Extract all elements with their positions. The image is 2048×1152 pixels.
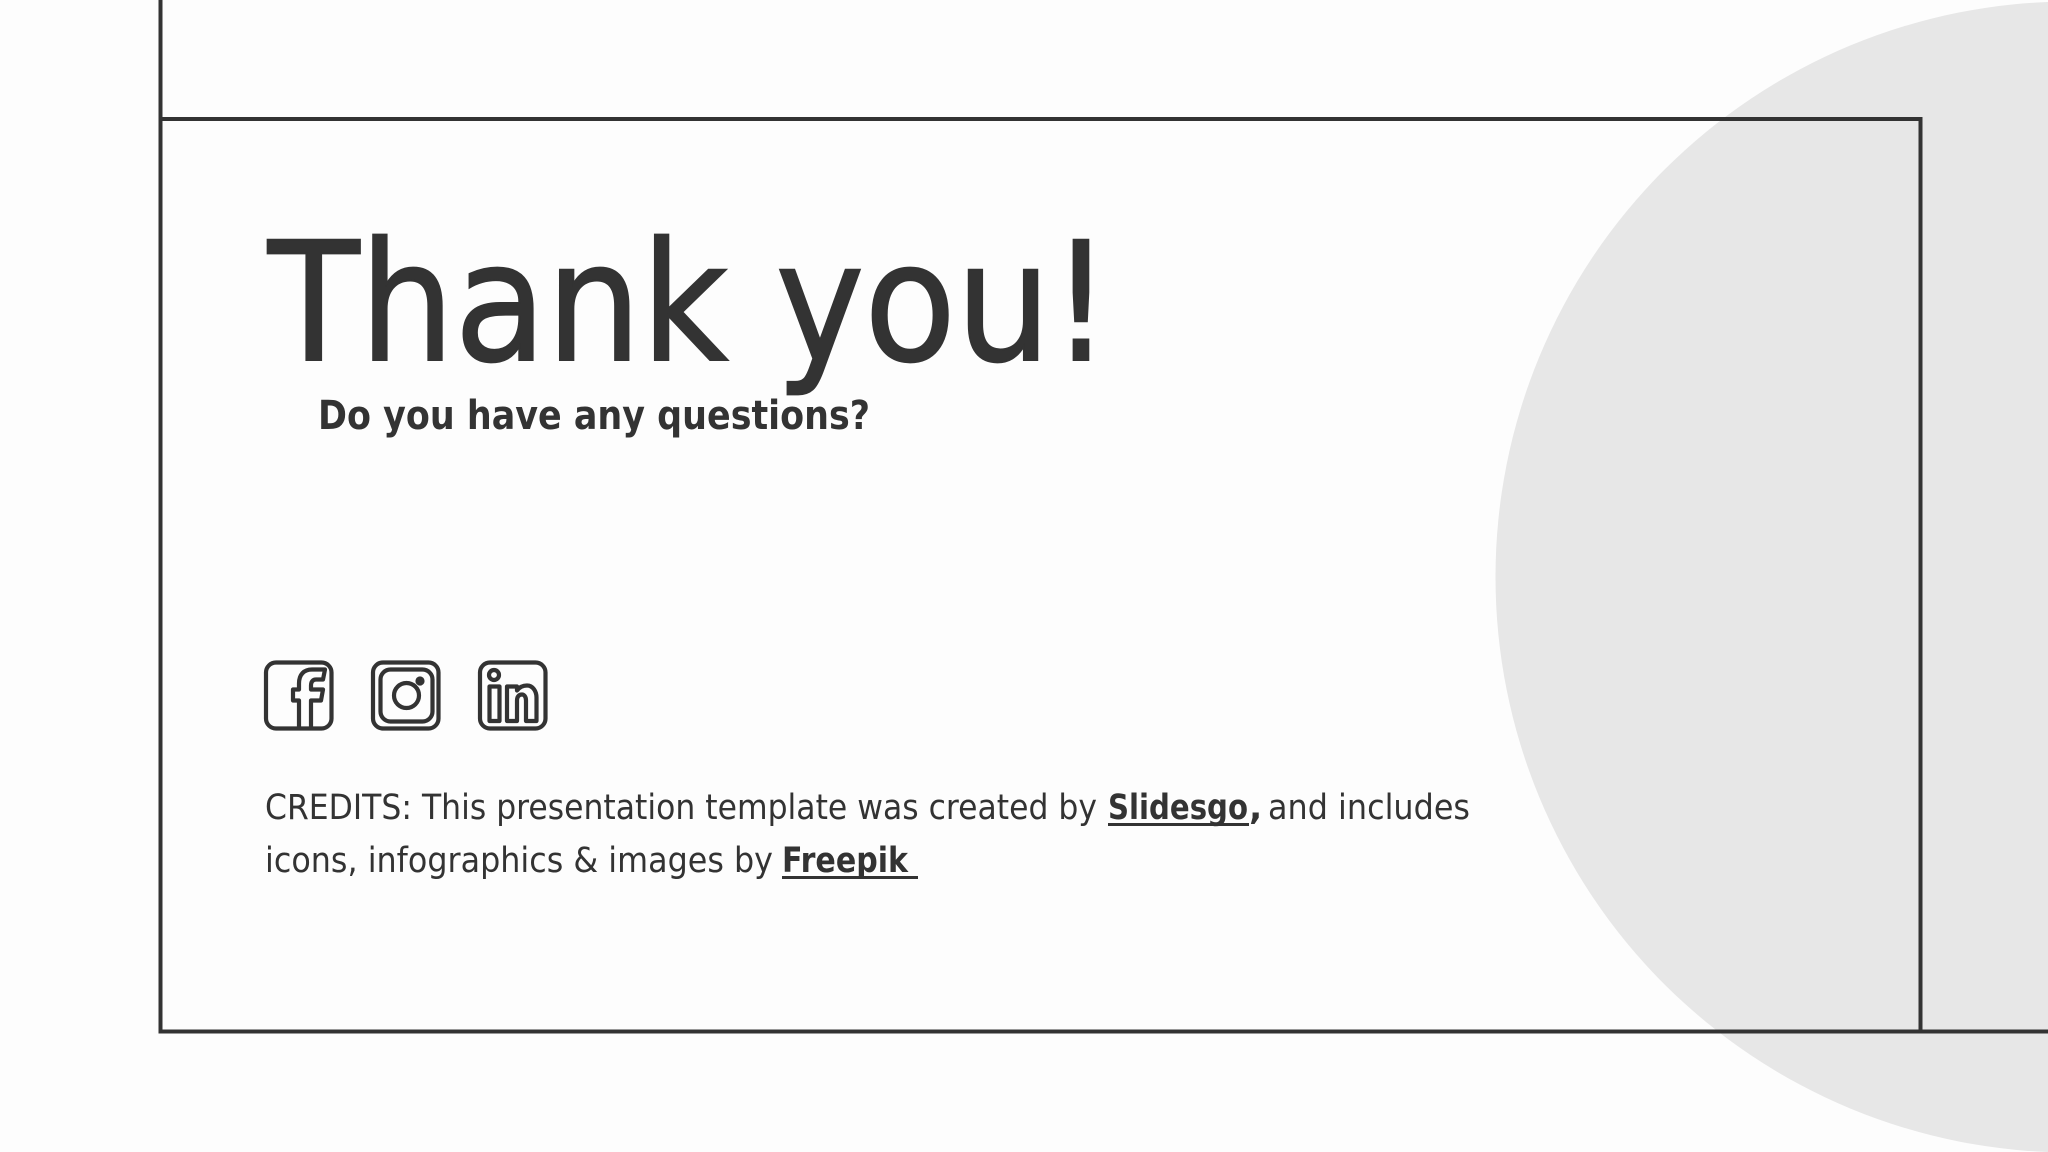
credits line 1: CREDITS: This presentation template was created by: [265, 788, 1097, 828]
credits line 2: icons, infographics & images by: [265, 841, 773, 881]
title: Thank you!: [267, 207, 1111, 399]
icon: facebook: [266, 662, 332, 728]
link: Slidesgo: Slidesgo: [1108, 788, 1248, 828]
underline: Slidesgo: [1108, 823, 1249, 826]
icon: linkedin: [480, 662, 546, 728]
subtitle: Do you have any questions?: [318, 393, 870, 439]
underline: Freepik: [782, 876, 918, 879]
credits text: [265, 788, 1470, 881]
credits line 1 end: and includes: [1268, 788, 1470, 828]
social icons: [266, 662, 546, 728]
icon: instagram: [373, 662, 438, 728]
decorative grey circle: [1496, 2, 2048, 1152]
link: Freepik: Freepik: [782, 841, 909, 881]
credits line 1 comma: ,: [1249, 788, 1262, 828]
